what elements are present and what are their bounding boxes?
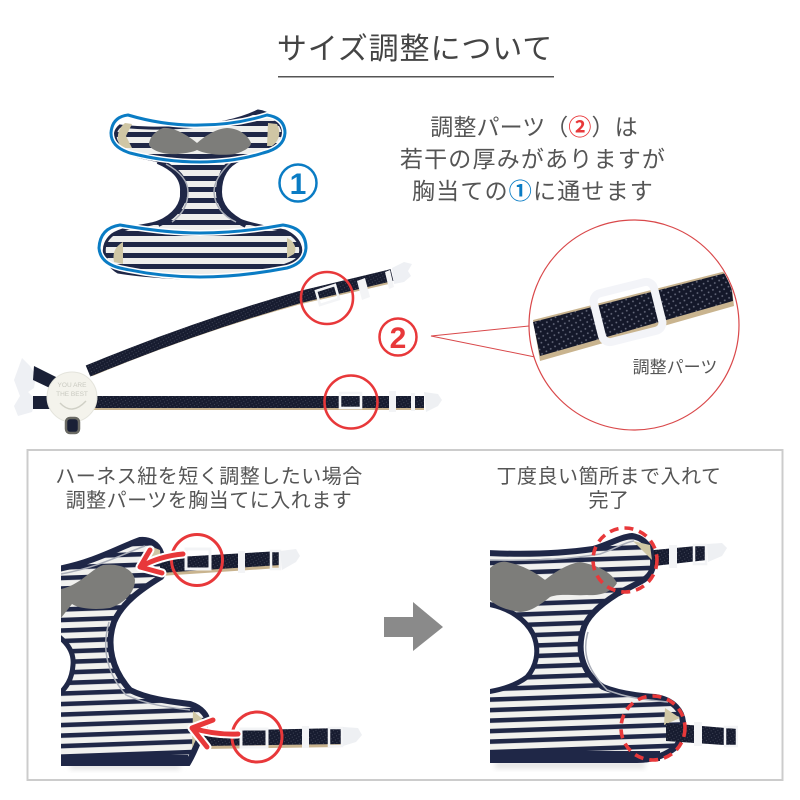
harness straps photo <box>14 262 442 433</box>
panel: how to adjust <box>28 450 782 780</box>
hole edge <box>487 604 537 692</box>
strap top <box>166 565 279 576</box>
harness photo: body with blue outlines <box>99 111 306 278</box>
right instruction text: 完了 <box>588 489 630 512</box>
dashed circle top <box>593 528 657 592</box>
icon: circled number 2 <box>380 318 416 356</box>
tan lining <box>113 123 295 264</box>
title: サイズ調整について <box>277 33 553 66</box>
arrow: grey to the right <box>384 602 443 651</box>
left instruction text: ハーネス紐を短く調整したい場合 <box>55 465 363 488</box>
description text: 調整パーツ（②）は <box>430 114 638 140</box>
description text: 若干の厚みがありますが <box>400 146 666 172</box>
description text <box>400 114 666 204</box>
right instruction text <box>497 465 721 512</box>
icon: ring <box>66 418 79 433</box>
right photo: harness after insertion <box>487 528 738 768</box>
callout: magnified slider part <box>431 220 739 430</box>
bow <box>490 562 617 612</box>
icon: circled number 1: 1 <box>290 168 306 201</box>
bow <box>61 565 135 618</box>
red circles on straps <box>301 272 353 324</box>
blue outline: bottom panel <box>99 225 306 277</box>
icon: circled number 2: 2 <box>390 322 406 355</box>
callout pointer <box>431 326 535 357</box>
icon: round logo disc: YOU ARE <box>58 382 87 389</box>
left instruction text: 調整パーツを胸当てに入れます <box>66 489 352 512</box>
icon: grey bow <box>149 128 251 155</box>
red arrow top <box>140 550 183 573</box>
lower strap <box>90 391 442 412</box>
icon: round logo disc <box>47 372 97 422</box>
red circle bottom <box>232 712 282 762</box>
icon: circled number 1 <box>280 164 316 202</box>
right instruction text: 丁度良い箇所まで入れて <box>497 465 721 488</box>
straps <box>654 545 707 566</box>
callout label: 調整パーツ <box>633 358 717 377</box>
upper strap <box>88 262 412 375</box>
left photo: harness before insertion <box>58 534 362 769</box>
left instruction text <box>55 465 363 512</box>
dashed circle bottom <box>621 696 685 760</box>
hole edge <box>58 636 73 695</box>
description text: 胸当ての①に通せます <box>412 178 654 204</box>
blue outline: top panel <box>111 115 285 162</box>
left buckles <box>14 358 36 416</box>
icon: round logo disc: THE BEST <box>56 391 88 398</box>
strap bottom <box>211 744 341 749</box>
red arrow bottom <box>192 720 238 747</box>
red circle top <box>172 534 222 586</box>
